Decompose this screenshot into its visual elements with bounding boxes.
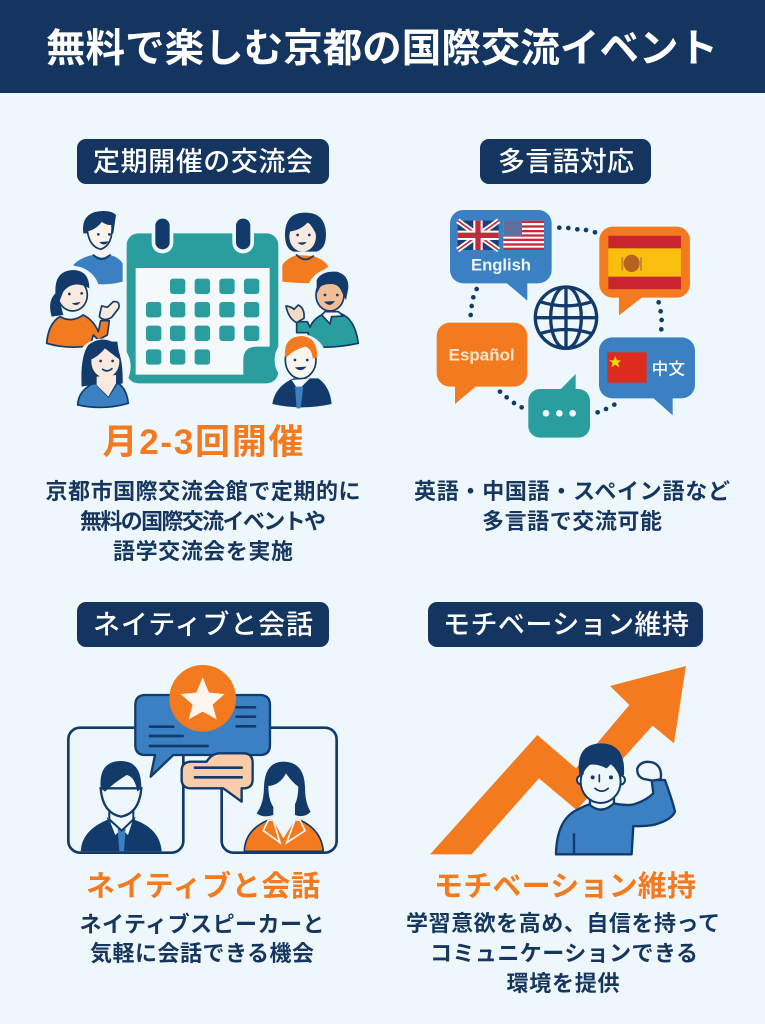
panel: regular events bbox=[45, 139, 361, 564]
description: motivation: 学習意欲を高め、自信を持って bbox=[406, 911, 720, 936]
person: woman top right bbox=[282, 213, 328, 283]
illustration: language bubbles bbox=[437, 210, 695, 438]
speech bubble: blue bbox=[135, 695, 270, 777]
sub heading: native conversation: ネイティブと会話 bbox=[86, 869, 320, 903]
description: motivation: コミュニケーションできる bbox=[430, 941, 698, 966]
heading pill: native conversation: ネイティブと会話 bbox=[93, 610, 313, 640]
bubble: English bbox=[450, 210, 552, 301]
person: man right bbox=[286, 269, 358, 347]
description: regular events: 京都市国際交流会館で定期的に bbox=[46, 479, 360, 504]
frame: left speaker bbox=[68, 728, 183, 853]
title: 無料で楽しむ京都の国際交流イベント bbox=[46, 27, 718, 71]
bubble: more languages bbox=[528, 374, 590, 438]
description: native conversation bbox=[80, 912, 324, 966]
person: woman left bbox=[45, 266, 119, 347]
header banner bbox=[0, 0, 765, 93]
heading pill: regular events: 定期開催の交流会 bbox=[93, 147, 313, 177]
bubble: English: English bbox=[471, 256, 531, 275]
description: regular events bbox=[46, 479, 360, 564]
description: motivation bbox=[406, 911, 720, 996]
description: regular events: 無料の国際交流イベントや bbox=[80, 509, 326, 534]
icon: star badge bbox=[169, 665, 236, 732]
arrow: rising bbox=[430, 666, 686, 854]
bubble: Chinese bbox=[599, 337, 695, 415]
person: man top left bbox=[73, 211, 123, 284]
person: man bottom right bbox=[272, 334, 332, 408]
heading pill: motivation: モチベーション維持 bbox=[443, 610, 689, 640]
person: woman bottom left bbox=[75, 339, 131, 407]
description: multilingual bbox=[414, 479, 730, 534]
description: native conversation: 気軽に会話できる機会 bbox=[90, 941, 314, 966]
heading pill: multilingual: 多言語対応 bbox=[498, 147, 634, 177]
description: multilingual: 英語・中国語・スペイン語など bbox=[414, 479, 730, 504]
sub heading: motivation: モチベーション維持 bbox=[434, 870, 696, 903]
heading pill: regular events bbox=[77, 139, 329, 184]
illustration: video conversation bbox=[68, 665, 337, 853]
speech bubble: peach bbox=[182, 753, 253, 802]
description: native conversation: ネイティブスピーカーと bbox=[80, 912, 324, 937]
person: man in suit bbox=[81, 761, 162, 851]
heading pill: motivation bbox=[428, 602, 703, 647]
person: flexing man bbox=[556, 743, 675, 854]
heading pill: native conversation bbox=[77, 602, 329, 647]
icon: calendar bbox=[127, 215, 278, 383]
person: woman in orange bbox=[244, 762, 323, 851]
heading pill: multilingual bbox=[480, 139, 651, 184]
illustration: rising arrow and man bbox=[430, 666, 686, 854]
bubble: Español: Español bbox=[449, 346, 515, 365]
bubble: Español bbox=[437, 323, 527, 404]
panel: native conversation bbox=[68, 602, 337, 966]
icon: globe bbox=[535, 287, 597, 348]
illustration: calendar and people bbox=[45, 211, 358, 408]
description: multilingual: 多言語で交流可能 bbox=[482, 509, 662, 534]
dotted connectors bbox=[468, 225, 664, 415]
panel: multilingual bbox=[414, 139, 730, 534]
frame: right speaker bbox=[222, 728, 337, 853]
description: motivation: 環境を提供 bbox=[506, 971, 620, 996]
description: regular events: 語学交流会を実施 bbox=[113, 539, 293, 564]
bubble: Chinese: 中文 bbox=[652, 359, 685, 378]
bubble: Spanish flag bbox=[599, 227, 690, 315]
stat: twice or thrice monthly: 月2-3回開催 bbox=[102, 423, 304, 462]
panel: motivation bbox=[406, 602, 720, 996]
